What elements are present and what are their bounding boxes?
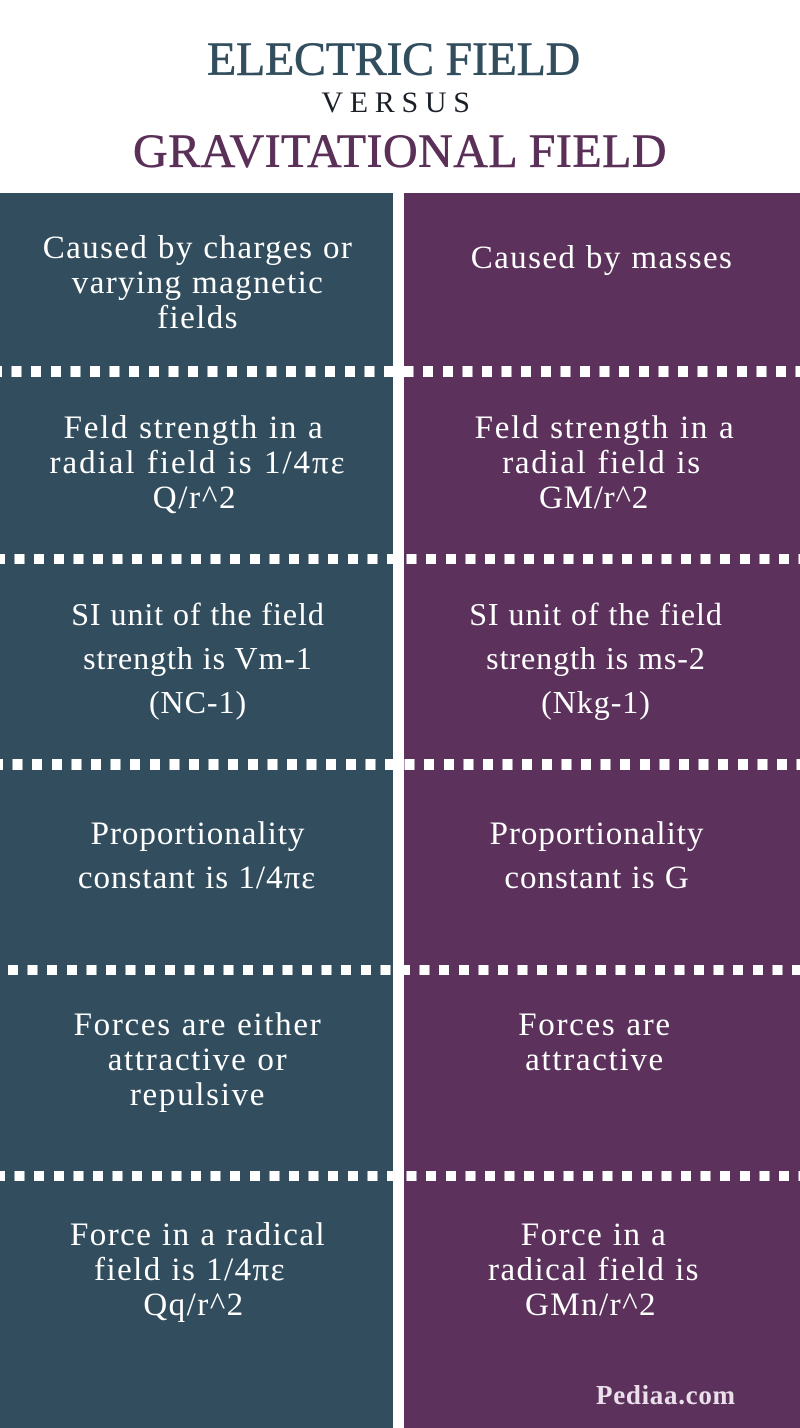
text: electric SI unit: strength is Vm-1 xyxy=(83,640,313,676)
logo: Pediaa.com: Pediaa.com xyxy=(596,1380,736,1410)
text: gravitational cause: Caused by masses xyxy=(471,240,733,276)
text: electric proportionality constant xyxy=(78,816,316,896)
text: gravitational radial force: GMn/r^2 xyxy=(525,1287,657,1323)
text: electric radial force: Qq/r^2 xyxy=(143,1287,245,1323)
panel: electric field column xyxy=(0,193,393,1428)
text: gravitational SI unit: SI unit of the field xyxy=(469,596,723,632)
text: gravitational field strength: Feld strength in a xyxy=(475,410,735,446)
text: electric SI unit: SI unit of the field xyxy=(71,596,325,632)
subtitle: versus: VERSUS xyxy=(321,86,477,119)
divider row 2 xyxy=(0,554,800,564)
text: electric proportionality constant: Proportionality xyxy=(91,816,305,852)
text: electric proportionality constant: constant is 1/4πε xyxy=(78,860,316,896)
text: electric cause xyxy=(43,230,353,336)
text: electric field strength: Feld strength in a xyxy=(64,410,324,446)
text: electric radial force: Force in a radical xyxy=(70,1217,326,1253)
text: electric cause: fields xyxy=(157,300,239,336)
text: electric radial force: field is 1/4πε xyxy=(94,1252,286,1288)
title: gravitational field: GRAVITATIONAL FIELD xyxy=(133,125,667,178)
divider row 5 xyxy=(0,1170,800,1181)
text: gravitational field strength: GM/r^2 xyxy=(539,480,649,516)
text: gravitational SI unit: (Nkg-1) xyxy=(541,684,651,720)
text: electric force type: repulsive xyxy=(130,1077,266,1113)
text: gravitational proportionality constant xyxy=(490,816,704,896)
text: gravitational radial force: Force in a xyxy=(521,1217,667,1253)
text: gravitational force type: Forces are xyxy=(518,1007,672,1043)
text: electric field strength: radial field is 1/4πε xyxy=(49,445,347,481)
title: electric field: ELECTRIC FIELD xyxy=(207,33,580,86)
divider row 1 xyxy=(0,366,800,376)
text: gravitational field strength: radial field is xyxy=(502,445,702,481)
text: gravitational radial force: radical field is xyxy=(488,1252,700,1288)
text: electric force type xyxy=(74,1007,322,1113)
text: gravitational force type xyxy=(518,1007,672,1078)
text: gravitational radial force xyxy=(488,1217,700,1323)
text: electric cause: varying magnetic xyxy=(72,265,324,301)
text: electric radial force xyxy=(70,1217,326,1323)
text: electric force type: Forces are either xyxy=(74,1007,322,1043)
text: electric SI unit: (NC-1) xyxy=(149,684,247,720)
text: electric SI unit xyxy=(71,596,325,720)
text: electric cause: Caused by charges or xyxy=(43,230,353,266)
text: gravitational proportionality constant: Proportionality xyxy=(490,816,704,852)
text: electric force type: attractive or xyxy=(108,1042,288,1078)
text: gravitational SI unit: strength is ms-2 xyxy=(486,640,706,676)
divider row 4 xyxy=(8,964,800,975)
text: gravitational SI unit xyxy=(469,596,723,720)
text: electric field strength: Q/r^2 xyxy=(153,480,237,516)
text: electric field strength xyxy=(49,410,347,516)
text: gravitational proportionality constant: constant is G xyxy=(504,860,690,896)
panel: gravitational field column xyxy=(404,193,800,1428)
text: gravitational force type: attractive xyxy=(525,1042,665,1078)
divider row 3 xyxy=(0,759,800,770)
text: gravitational field strength xyxy=(475,410,735,516)
